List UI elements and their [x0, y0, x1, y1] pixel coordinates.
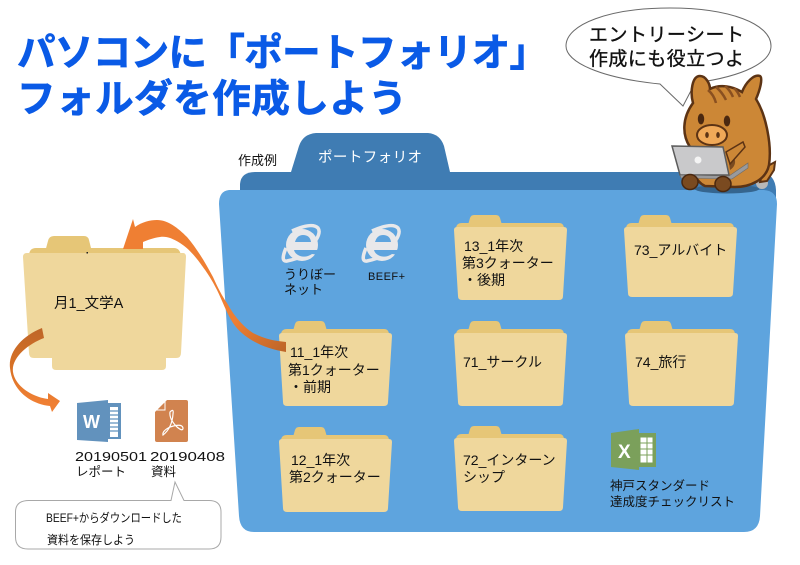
- label: material file: 20190408: [150, 450, 225, 464]
- callout: beef download: BEEF+からダウンロードした: [46, 510, 182, 525]
- icon: word: W: [83, 412, 100, 432]
- label: BEEF+: BEEF+: [368, 271, 405, 283]
- folder tab: [291, 133, 450, 172]
- callout: speech bubble: エントリーシート: [589, 25, 744, 46]
- folder: 71: [454, 321, 567, 406]
- title: [17, 32, 548, 121]
- label: material file: 資料: [151, 465, 177, 479]
- folder: 71: 71_サークル: [463, 354, 542, 370]
- panel: large folder: [23, 236, 186, 370]
- icon: excel: X: [618, 442, 631, 463]
- folder: 12: 12_1年次: [291, 452, 350, 468]
- title: フォルダを作成しよう: [17, 78, 407, 121]
- arrow: to large folder: [123, 219, 286, 352]
- folder: 12: [279, 427, 392, 512]
- icon: word: [77, 400, 121, 442]
- folder: 11: ・前期: [289, 379, 331, 395]
- folder: 73: [624, 215, 737, 297]
- folder tab: ポートフォリオ: [318, 149, 422, 166]
- callout: beef download: [16, 482, 221, 549]
- label: report file: レポート: [76, 465, 126, 479]
- label: example: 作成例: [238, 153, 277, 168]
- panel: blue portfolio folder: [219, 133, 777, 532]
- folder: 73: 73_アルバイト: [634, 242, 727, 258]
- folder: 72: [454, 426, 567, 511]
- label: kobe standard checklist: 神戸スタンダード: [610, 478, 710, 493]
- label: report file: 20190501: [75, 450, 147, 464]
- folder: 11: 11_1年次: [290, 344, 348, 360]
- icon: pdf: [155, 400, 188, 442]
- folder back: [240, 172, 776, 200]
- folder: 11: 第1クォーター: [288, 362, 380, 378]
- folder: 13: ・後期: [463, 272, 505, 288]
- folder: 12: 第2クォーター: [289, 469, 381, 485]
- folder: 11: [279, 321, 392, 406]
- panel: large folder: 月1_文学A: [54, 295, 124, 312]
- callout: beef download: 資料を保存しよう: [47, 533, 135, 547]
- callout: speech bubble: [566, 8, 771, 106]
- icon: boar with laptop: [672, 76, 775, 194]
- folder: 72: 72_インターン: [463, 452, 556, 468]
- label: uribo net: うりぼー: [284, 267, 336, 282]
- title: パソコンに「ポートフォリオ」: [17, 32, 548, 75]
- arrow: to documents: [10, 328, 60, 412]
- icon: browser e 1: [283, 226, 320, 261]
- folder: 13: 第3クォーター: [462, 255, 554, 271]
- icon: excel: [611, 429, 656, 470]
- folder: 13: [454, 215, 567, 300]
- folder: 74: 74_旅行: [635, 354, 686, 370]
- folder: 74: [625, 321, 738, 406]
- folder: 13: 13_1年次: [464, 238, 523, 254]
- label: kobe standard checklist: 達成度チェックリスト: [610, 494, 735, 509]
- callout: speech bubble: 作成にも役立つよ: [589, 48, 744, 70]
- label: uribo net: ネット: [284, 282, 323, 297]
- folder front: [219, 190, 777, 532]
- icon: browser e 2: [363, 226, 400, 261]
- folder: 72: シップ: [463, 469, 505, 485]
